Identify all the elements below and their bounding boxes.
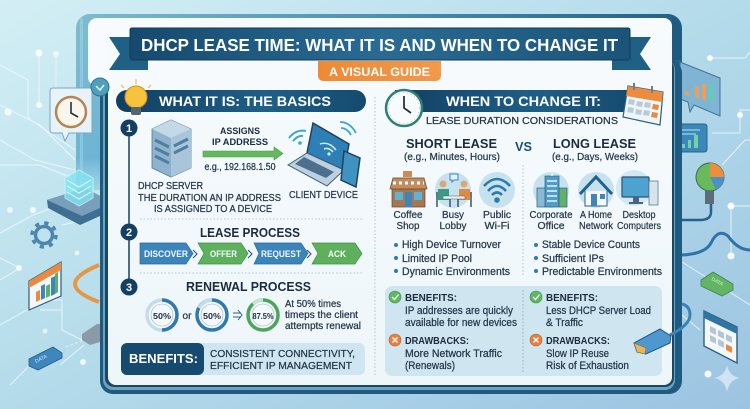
title banner [109, 28, 651, 70]
icon captions: Shop [396, 221, 420, 232]
renewal note: At 50% times [285, 298, 341, 310]
gauge: 50 percent: 50% [153, 311, 171, 321]
step: ack: ACK [328, 249, 346, 259]
right decoration: green data stick [701, 272, 733, 296]
icon: calendar [623, 83, 663, 125]
gauge: 50 percent second [197, 300, 227, 330]
section header [116, 79, 366, 115]
short lease drawbacks: DRAWBACKS: [405, 335, 469, 347]
left decoration: orange cable [75, 265, 99, 302]
server labels: THE DURATION AN IP ADDRESS [138, 193, 281, 204]
long lease benefits: & Traffic [546, 317, 584, 329]
subtitle tag [318, 61, 441, 81]
icon captions: Coffee [394, 210, 423, 221]
left decoration: gear icon [32, 223, 56, 247]
long lease heading: (e.g., Days, Weeks) [552, 151, 638, 163]
icon captions: Desktop [622, 210, 656, 221]
short lease benefits: BENEFITS: [405, 292, 457, 304]
icon captions: Computers [617, 221, 661, 232]
gauge: 87.5 percent: 87.5% [252, 312, 274, 321]
step timeline [120, 120, 138, 296]
right decoration: green data stick: DATA [710, 276, 725, 288]
short lease benefits: IP addresses are quickly [405, 305, 514, 317]
long lease bullet list [534, 239, 662, 278]
long lease heading [552, 136, 638, 163]
step timeline: 2 [126, 227, 132, 239]
long lease bullet list: Stable Device Counts [542, 239, 640, 251]
long lease benefits: BENEFITS: [546, 292, 598, 304]
icon captions: Corporate [530, 210, 573, 221]
icon: wall clock [386, 90, 422, 126]
benefits bar: EFFICIENT IP MANAGEMENT [210, 360, 353, 372]
gauge: 50 percent second: 50% [203, 311, 221, 321]
icon: public wi-fi [479, 172, 515, 208]
gauge: 87.5 percent [248, 300, 278, 330]
arrow: assigns IP address: e.g., 192.168.1.50 [204, 162, 276, 173]
section header [395, 90, 630, 127]
lease process [140, 225, 362, 264]
step: request [254, 243, 308, 264]
long lease heading: LONG LEASE [553, 136, 636, 151]
renewal process: RENEWAL PROCESS [186, 279, 311, 294]
section header: WHEN TO CHANGE IT: [446, 93, 601, 109]
renewal note: timeps the client [285, 309, 358, 321]
versus label: VS [515, 139, 532, 154]
comparison panel [385, 286, 662, 376]
step: discover: DISCOVER [144, 249, 188, 259]
status check badge [91, 78, 109, 96]
short lease benefits [389, 291, 518, 329]
left section: the basics [116, 79, 366, 375]
short lease benefits: available for new devices [405, 317, 518, 329]
right decoration: blue chat box [669, 124, 707, 152]
long lease bullet list: Predictable Environments [542, 266, 662, 278]
renewal note: attempts renewal [285, 320, 361, 332]
icon captions: Busy [442, 210, 464, 221]
left decoration: calendar chart [29, 262, 61, 310]
short lease heading [404, 136, 500, 163]
benefits bar: BENEFITS: [129, 351, 198, 366]
arrow: assigns IP address [203, 126, 283, 173]
step timeline: 3 [126, 282, 132, 294]
long lease bullet list: Sufficient IPs [542, 253, 604, 265]
gauge: 50 percent [147, 300, 177, 330]
icon: coffee shop [390, 171, 427, 207]
step: discover [140, 243, 193, 264]
short lease drawbacks: (Renewals) [405, 360, 455, 372]
long lease benefits [530, 291, 651, 329]
title banner: DHCP LEASE TIME: WHAT IT IS AND WHEN TO CHANGE IT [141, 35, 618, 55]
lease process: LEASE PROCESS [200, 225, 300, 240]
server labels: IS ASSIGNED TO A DEVICE [154, 204, 272, 215]
step: offer: OFFER [210, 249, 237, 259]
arrow: assigns IP address: ASSIGNS [220, 126, 260, 137]
icon captions [394, 210, 661, 232]
right decoration: sparkle [714, 365, 740, 392]
renewal process [147, 279, 361, 332]
short lease bullet list: Dynamic Environments [402, 266, 510, 278]
step: request: REQUEST [261, 249, 301, 259]
outer teal frame and column [76, 14, 682, 190]
left decoration: data stick: DATA [34, 354, 49, 365]
short lease drawbacks [389, 334, 503, 372]
short lease heading: (e.g., Minutes, Hours) [404, 151, 500, 163]
icon captions: Wi-Fi [484, 221, 510, 232]
step: ack [312, 243, 362, 264]
step: offer [198, 243, 248, 264]
icon captions: Lobby [440, 221, 466, 232]
icon: server [152, 120, 191, 177]
icon: busy lobby [435, 172, 471, 208]
short lease drawbacks: More Network Traffic [405, 348, 503, 360]
server labels: DHCP SERVER [138, 181, 203, 192]
icon captions: Office [538, 221, 565, 232]
left decoration: router with hologram [47, 170, 100, 225]
icon: client device laptop [288, 122, 360, 187]
section header: WHAT IT IS: THE BASICS [159, 93, 331, 109]
long lease drawbacks: DRAWBACKS: [546, 335, 610, 347]
ethernet plug and cable [634, 304, 690, 354]
right decoration: chart bubble [680, 62, 720, 116]
renewal note [285, 298, 361, 332]
benefits bar [121, 343, 365, 375]
benefits bar: CONSISTENT CONNECTIVITY, [210, 348, 355, 360]
short lease bullet list: High Device Turnover [402, 239, 501, 251]
arrow: assigns IP address: IP ADDRESS [212, 137, 268, 148]
short lease bullet list: Limited IP Pool [402, 253, 472, 265]
step timeline: 1 [126, 123, 132, 135]
right decoration: calendar [704, 311, 737, 363]
right section: when to change it [385, 83, 663, 376]
right decoration: pie chart bulb [682, 163, 724, 220]
icon captions: A Home [580, 210, 612, 221]
short lease heading: SHORT LEASE [406, 136, 497, 151]
client device label: CLIENT DEVICE [289, 190, 358, 201]
left decoration: data stick [29, 347, 62, 370]
icon: corporate office [533, 170, 569, 208]
left decoration: clock speech bubble [50, 88, 92, 141]
long lease drawbacks [530, 334, 629, 372]
icon captions: Public [483, 210, 511, 221]
short lease bullet list [394, 239, 510, 278]
long lease drawbacks: Slow IP Reuse [546, 348, 609, 360]
section header: LEASE DURATION CONSIDERATIONS [426, 115, 618, 127]
icon captions: Network [579, 221, 614, 232]
long lease drawbacks: Risk of Exhaustion [546, 360, 629, 372]
subtitle tag: A VISUAL GUIDE [329, 65, 430, 79]
icon: desktop computers [616, 170, 658, 206]
icon: home network [578, 172, 614, 208]
long lease benefits: Less DHCP Server Load [546, 305, 651, 317]
renewal process: or [183, 311, 192, 322]
right decoration: wavy cable [682, 233, 750, 255]
left decoration: network plug [66, 324, 100, 347]
server labels [138, 181, 281, 215]
main panel frame [88, 18, 682, 394]
